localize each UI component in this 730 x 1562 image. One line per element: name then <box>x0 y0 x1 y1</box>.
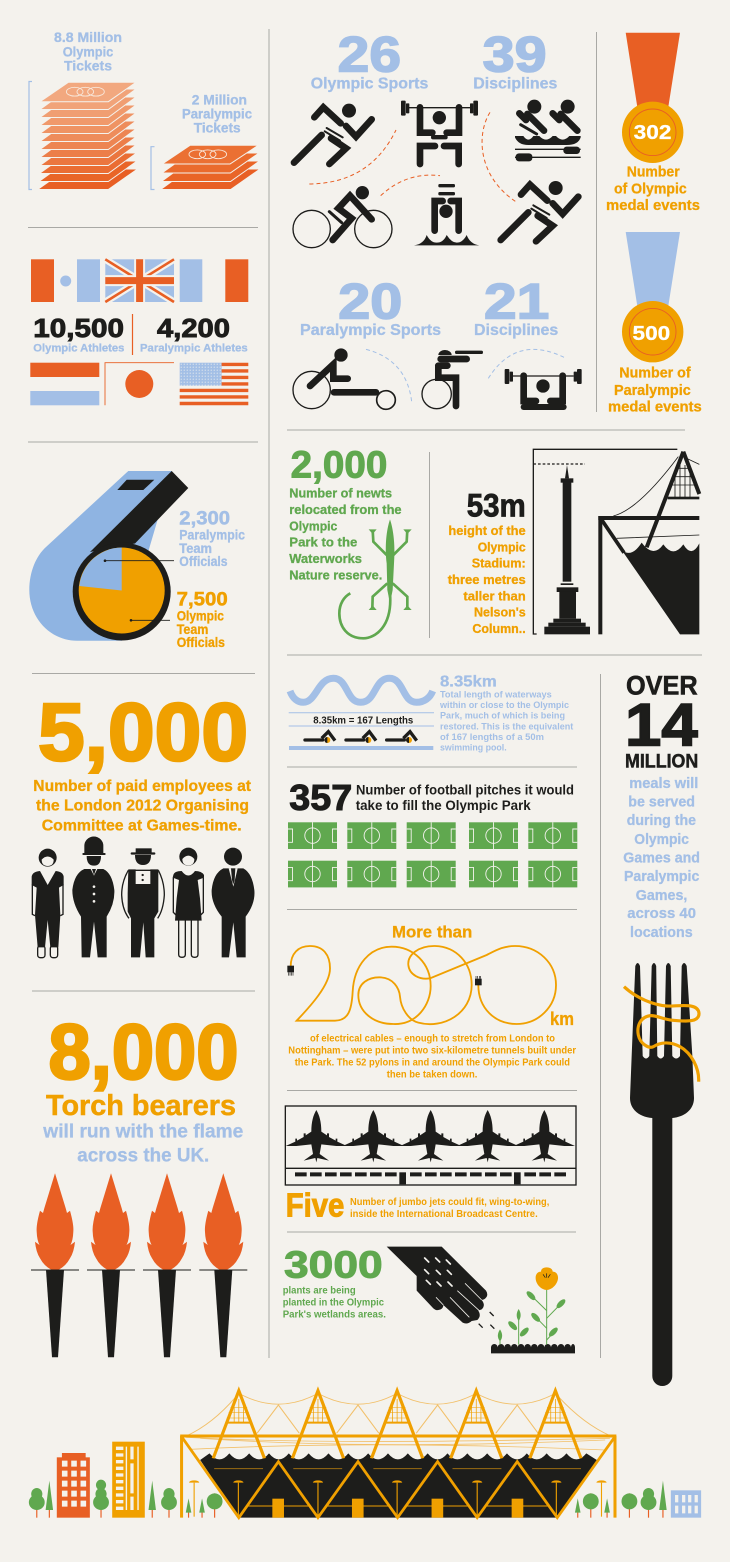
icon: stadium interior details <box>214 1469 581 1518</box>
text: waterways description: Park, much of which is being <box>440 711 565 721</box>
label: Paralympic tickets <box>182 92 252 136</box>
icon: stadium roof cables <box>186 1393 611 1450</box>
icon: woman in short dress <box>173 848 204 957</box>
figure: 26 Olympic sports <box>311 27 428 92</box>
icon: flower <box>525 1267 567 1345</box>
icon: torch 2 <box>87 1173 135 1357</box>
text: pitches description: Number of football pitches it would <box>356 782 574 797</box>
icon: water surface <box>289 746 433 750</box>
icon: woman in dress and trousers <box>32 849 64 958</box>
text: waterways description: restored. This is the equivalent <box>440 721 573 731</box>
text: employees description: Committee at Games-time. <box>42 818 242 835</box>
text: employees description: the London 2012 Organising <box>36 798 249 815</box>
icon: Nelson's Column beside stadium section <box>533 449 699 634</box>
icon: rings on Paralympic ticket <box>189 150 227 159</box>
panel: 53m stadium height <box>448 449 699 636</box>
text: Olympic medal events: Number <box>627 164 680 181</box>
flag: United States <box>180 363 248 404</box>
text: jets description <box>350 1197 549 1220</box>
text: newts description: Park to the <box>289 535 357 550</box>
dashed blue connectors <box>366 349 566 402</box>
figure: 2,300 Paralympic team officials: Team <box>179 541 212 556</box>
icon: stadium bowl <box>200 1453 597 1518</box>
heading: over 14 million: MILLION <box>625 750 698 772</box>
text: cables description <box>288 1034 576 1081</box>
label: km: km <box>550 1009 574 1029</box>
text: meals description <box>623 775 700 941</box>
icon: swimmers <box>305 732 417 743</box>
text: Paralympic medal events: Number of <box>619 365 692 382</box>
figure: 2,300 Paralympic team officials: Paralympic <box>179 527 245 542</box>
icon: stadium frame and masts <box>180 1391 616 1518</box>
text: stadium description: Olympic <box>478 539 526 554</box>
icons: Paralympic sports <box>293 348 582 410</box>
text: newts description: Waterworks <box>289 551 362 566</box>
text: meals description: meals will <box>629 775 698 792</box>
figure: Five: Five <box>286 1187 344 1224</box>
label: Olympic tickets: Olympic <box>63 44 113 60</box>
figure: 3000: 3000 <box>284 1244 383 1286</box>
text: Paralympic medal events: medal events <box>608 399 702 416</box>
icon: fork with spaghetti <box>624 963 699 1386</box>
panel: paid employees <box>32 687 254 958</box>
figure: 39 disciplines: 39 <box>483 27 547 83</box>
text: stadium description: taller than <box>463 588 526 603</box>
icon: blue medal: 500 <box>632 323 670 345</box>
text: meals description: Olympic <box>634 831 689 848</box>
figure: 39 disciplines: Disciplines <box>473 75 557 92</box>
label: Olympic tickets: Tickets <box>64 58 112 74</box>
icon: amber tower <box>112 1442 145 1518</box>
text: waterways description: Total length of waterways <box>440 689 552 699</box>
heading: over 14 million: 14 <box>625 692 698 759</box>
text: stadium description: Column.. <box>472 621 526 636</box>
icon: soil <box>491 1344 575 1353</box>
icon: stack of Olympic tickets <box>38 82 138 190</box>
icon: runner <box>294 104 372 164</box>
label: Paralympic tickets: Paralympic <box>182 106 252 122</box>
icon: seedlings <box>498 1309 530 1345</box>
heading: more than: More than <box>392 923 472 942</box>
vertical divider: left column <box>268 29 270 1358</box>
text: jets description: inside the International Broadcast Centre. <box>350 1209 538 1220</box>
icon: man in suit <box>212 848 254 957</box>
figure: 2,300 Paralympic team officials: 2,300 <box>179 508 230 530</box>
figure: 39 disciplines <box>473 27 557 92</box>
bracket: Paralympic stack <box>151 147 154 190</box>
figure: Olympic athletes <box>33 313 124 354</box>
figure: 5,000: 5,000 <box>38 687 248 778</box>
figure: 8,000: 8,000 <box>48 1008 238 1096</box>
flag: Netherlands <box>30 363 99 405</box>
text: newts description: Nature reserve. <box>289 567 382 582</box>
text: meals description: Paralympic <box>624 868 699 885</box>
text: jets description: Number of jumbo jets could fit, wing-to-wing, <box>350 1197 549 1208</box>
flag: France stylised <box>180 259 248 302</box>
text: flame description <box>42 1121 243 1167</box>
panel: electrical cables <box>287 923 576 1081</box>
figure: 7,500 Olympic team officials: Officials <box>177 635 225 650</box>
text: waterways description <box>439 689 573 753</box>
figure: Olympic athletes: 10,500 <box>33 313 124 343</box>
panel: team officials whistle <box>29 471 245 650</box>
figure: 21 disciplines: 21 <box>484 273 549 329</box>
icon: wheelchair racer <box>293 348 395 409</box>
icon: swimmer <box>414 184 479 245</box>
text: stadium description <box>448 523 526 636</box>
text: newts description: Olympic <box>289 518 337 533</box>
text: cables description: the Park. The 52 pylons in and around the Olympic Park could <box>295 1058 570 1069</box>
label: lengths: 8.35km = 167 Lengths <box>313 714 413 726</box>
panel: meals served <box>623 670 700 1386</box>
figure: 21 disciplines <box>474 273 558 339</box>
text: meals description: across 40 <box>627 905 696 922</box>
panel: medal events <box>606 33 702 416</box>
flag: Canada stylised <box>31 259 100 302</box>
text: stadium description: Stadium: <box>472 556 526 571</box>
text: employees description <box>33 778 252 835</box>
panel: newts <box>289 445 412 638</box>
icon: Nelson's Column <box>544 465 590 634</box>
icon: rings on Olympic ticket <box>66 87 104 96</box>
icon: man in bowler hat <box>72 837 114 957</box>
label: Olympic tickets <box>54 29 122 74</box>
label: Paralympic tickets: 2 Million <box>192 92 247 108</box>
figure: 20 Paralympic sports: 20 <box>338 273 402 329</box>
text: flame description: will run with the flame <box>42 1121 243 1142</box>
panel: stadium skyline <box>29 1391 701 1518</box>
icon: newt <box>339 519 412 638</box>
icons: trees and street lamps <box>29 1480 667 1518</box>
text: Paralympic medal events <box>608 365 702 416</box>
icon: blue building <box>671 1490 701 1518</box>
figure: Olympic athletes: Olympic Athletes <box>33 342 124 354</box>
text: meals description: Games, <box>636 887 687 904</box>
text: Olympic medal events <box>606 164 700 214</box>
icon: stack of Paralympic tickets <box>161 145 260 190</box>
vertical divider: medals <box>596 32 598 412</box>
dashed orange connectors <box>309 112 517 203</box>
figure: 2,300 Paralympic team officials <box>179 508 245 569</box>
figure: Paralympic athletes <box>140 313 248 354</box>
figure: 357: 357 <box>289 777 352 818</box>
heading: over 14 million: OVER <box>626 670 698 700</box>
figure: 20 Paralympic sports: Paralympic Sports <box>300 322 441 339</box>
vertical divider: meals <box>600 674 602 1358</box>
label: Paralympic tickets: Tickets <box>194 120 241 136</box>
heading: over 14 million <box>625 670 698 772</box>
panel: International Broadcast Centre <box>285 1106 576 1224</box>
panel: wetland plants <box>283 1244 575 1353</box>
text: pitches description: take to fill the Olympic Park <box>356 798 531 813</box>
figure: 7,500 Olympic team officials: Olympic <box>177 608 224 623</box>
icon: weightlifter <box>401 101 478 164</box>
text: Paralympic medal events: Paralympic <box>614 382 691 399</box>
figure: 20 Paralympic sports <box>300 273 441 339</box>
panel: sports and disciplines <box>293 27 582 410</box>
panel: football pitches <box>288 777 577 887</box>
text: employees description: Number of paid employees at <box>33 778 252 795</box>
text: Olympic medal events: of Olympic <box>614 180 687 197</box>
figure: 7,500 Olympic team officials <box>177 590 228 650</box>
panel: athletes and flags <box>30 259 248 405</box>
icon: torch 4 <box>199 1173 247 1357</box>
figure: Paralympic athletes: Paralympic Athletes <box>140 342 248 354</box>
text: waterways description: within or close to the Olympic <box>439 700 569 710</box>
text: pitches description <box>356 782 574 813</box>
panel: tickets <box>29 29 260 190</box>
text: cables description: Nottingham – were put into two six-kilometre tunnels built under <box>288 1046 576 1057</box>
text: meals description: be served <box>628 794 695 811</box>
text: meals description: during the <box>627 812 696 829</box>
icon: second runner <box>501 181 578 241</box>
icon: river wave <box>290 678 433 702</box>
text: waterways description: of 167 lengths of a 50m <box>440 732 544 742</box>
icon: hand <box>387 1247 494 1329</box>
label: Olympic tickets: 8.8 Million <box>54 29 122 45</box>
text: flame description: across the UK. <box>77 1146 209 1167</box>
icon: stadium cross-section <box>598 452 699 634</box>
icon: orange medal: 302 <box>634 122 671 144</box>
icons: Olympic sports <box>293 100 581 248</box>
text: cables description: then be taken down. <box>387 1070 478 1081</box>
figure: 8.35km: 8.35km <box>440 674 497 691</box>
text: cables description: of electrical cables – enough to stretch from London to <box>310 1034 555 1045</box>
text: stadium description: three metres <box>448 572 526 587</box>
text: plants description: plants are being <box>283 1285 356 1296</box>
text: plants description: Park's wetlands areas. <box>283 1309 386 1320</box>
figure: 21 disciplines: Disciplines <box>474 322 558 339</box>
icon: workman in overalls <box>122 848 164 957</box>
flag: United Kingdom <box>105 259 174 302</box>
horizontal rules <box>28 228 702 1232</box>
bracket: Olympic stack <box>29 82 32 190</box>
text: Olympic medal events: medal events <box>606 197 700 214</box>
icon: orange medal <box>622 33 683 163</box>
icon: orange building <box>57 1453 90 1518</box>
icon: blue medal <box>622 232 683 362</box>
text: meals description: locations <box>630 924 693 941</box>
icon: hangar with five jets <box>285 1106 576 1185</box>
icons: ten football pitches <box>288 822 577 887</box>
icons: five staff figures <box>32 837 254 958</box>
icon: rowers <box>515 100 581 161</box>
icon: cyclist <box>293 186 392 248</box>
figure: 7,500 Olympic team officials: 7,500 <box>177 590 228 610</box>
icon: wheelchair shooter <box>422 350 481 409</box>
panel: waterways <box>289 674 573 753</box>
heading: torch bearers: Torch bearers <box>46 1090 236 1122</box>
text: newts description <box>289 486 402 582</box>
text: waterways description: swimming pool. <box>440 743 507 753</box>
panel: torch bearers <box>31 1008 247 1357</box>
text: meals description: Games and <box>623 850 700 866</box>
text: plants description: planted in the Olympic <box>283 1297 384 1308</box>
text: newts description: Number of newts <box>289 486 392 501</box>
text: stadium description: height of the <box>448 523 526 538</box>
figure: 7,500 Olympic team officials: Team <box>177 622 208 637</box>
icon: hand sowing seeds and plants <box>387 1247 575 1353</box>
icon: Paralympic powerlifter <box>505 369 582 410</box>
figure: 26 Olympic sports: 26 <box>338 27 401 83</box>
flag: Japan <box>105 363 174 405</box>
figure: Paralympic athletes: 4,200 <box>157 313 230 343</box>
figure: 53m: 53m <box>467 488 526 524</box>
text: plants description <box>283 1285 386 1320</box>
text: stadium description: Nelson's <box>474 605 526 620</box>
icons: four torches <box>31 1173 247 1357</box>
figure: 2,300 Paralympic team officials: Officials <box>179 554 228 569</box>
icon: cable forming 2000 <box>287 946 556 1024</box>
figure: 26 Olympic sports: Olympic Sports <box>311 75 428 92</box>
icon: whistle pie chart <box>29 471 188 641</box>
figure: 2,000: 2,000 <box>291 445 387 487</box>
icon: torch 3 <box>143 1173 191 1357</box>
icon: torch 1 <box>31 1173 79 1357</box>
text: newts description: relocated from the <box>289 502 402 517</box>
